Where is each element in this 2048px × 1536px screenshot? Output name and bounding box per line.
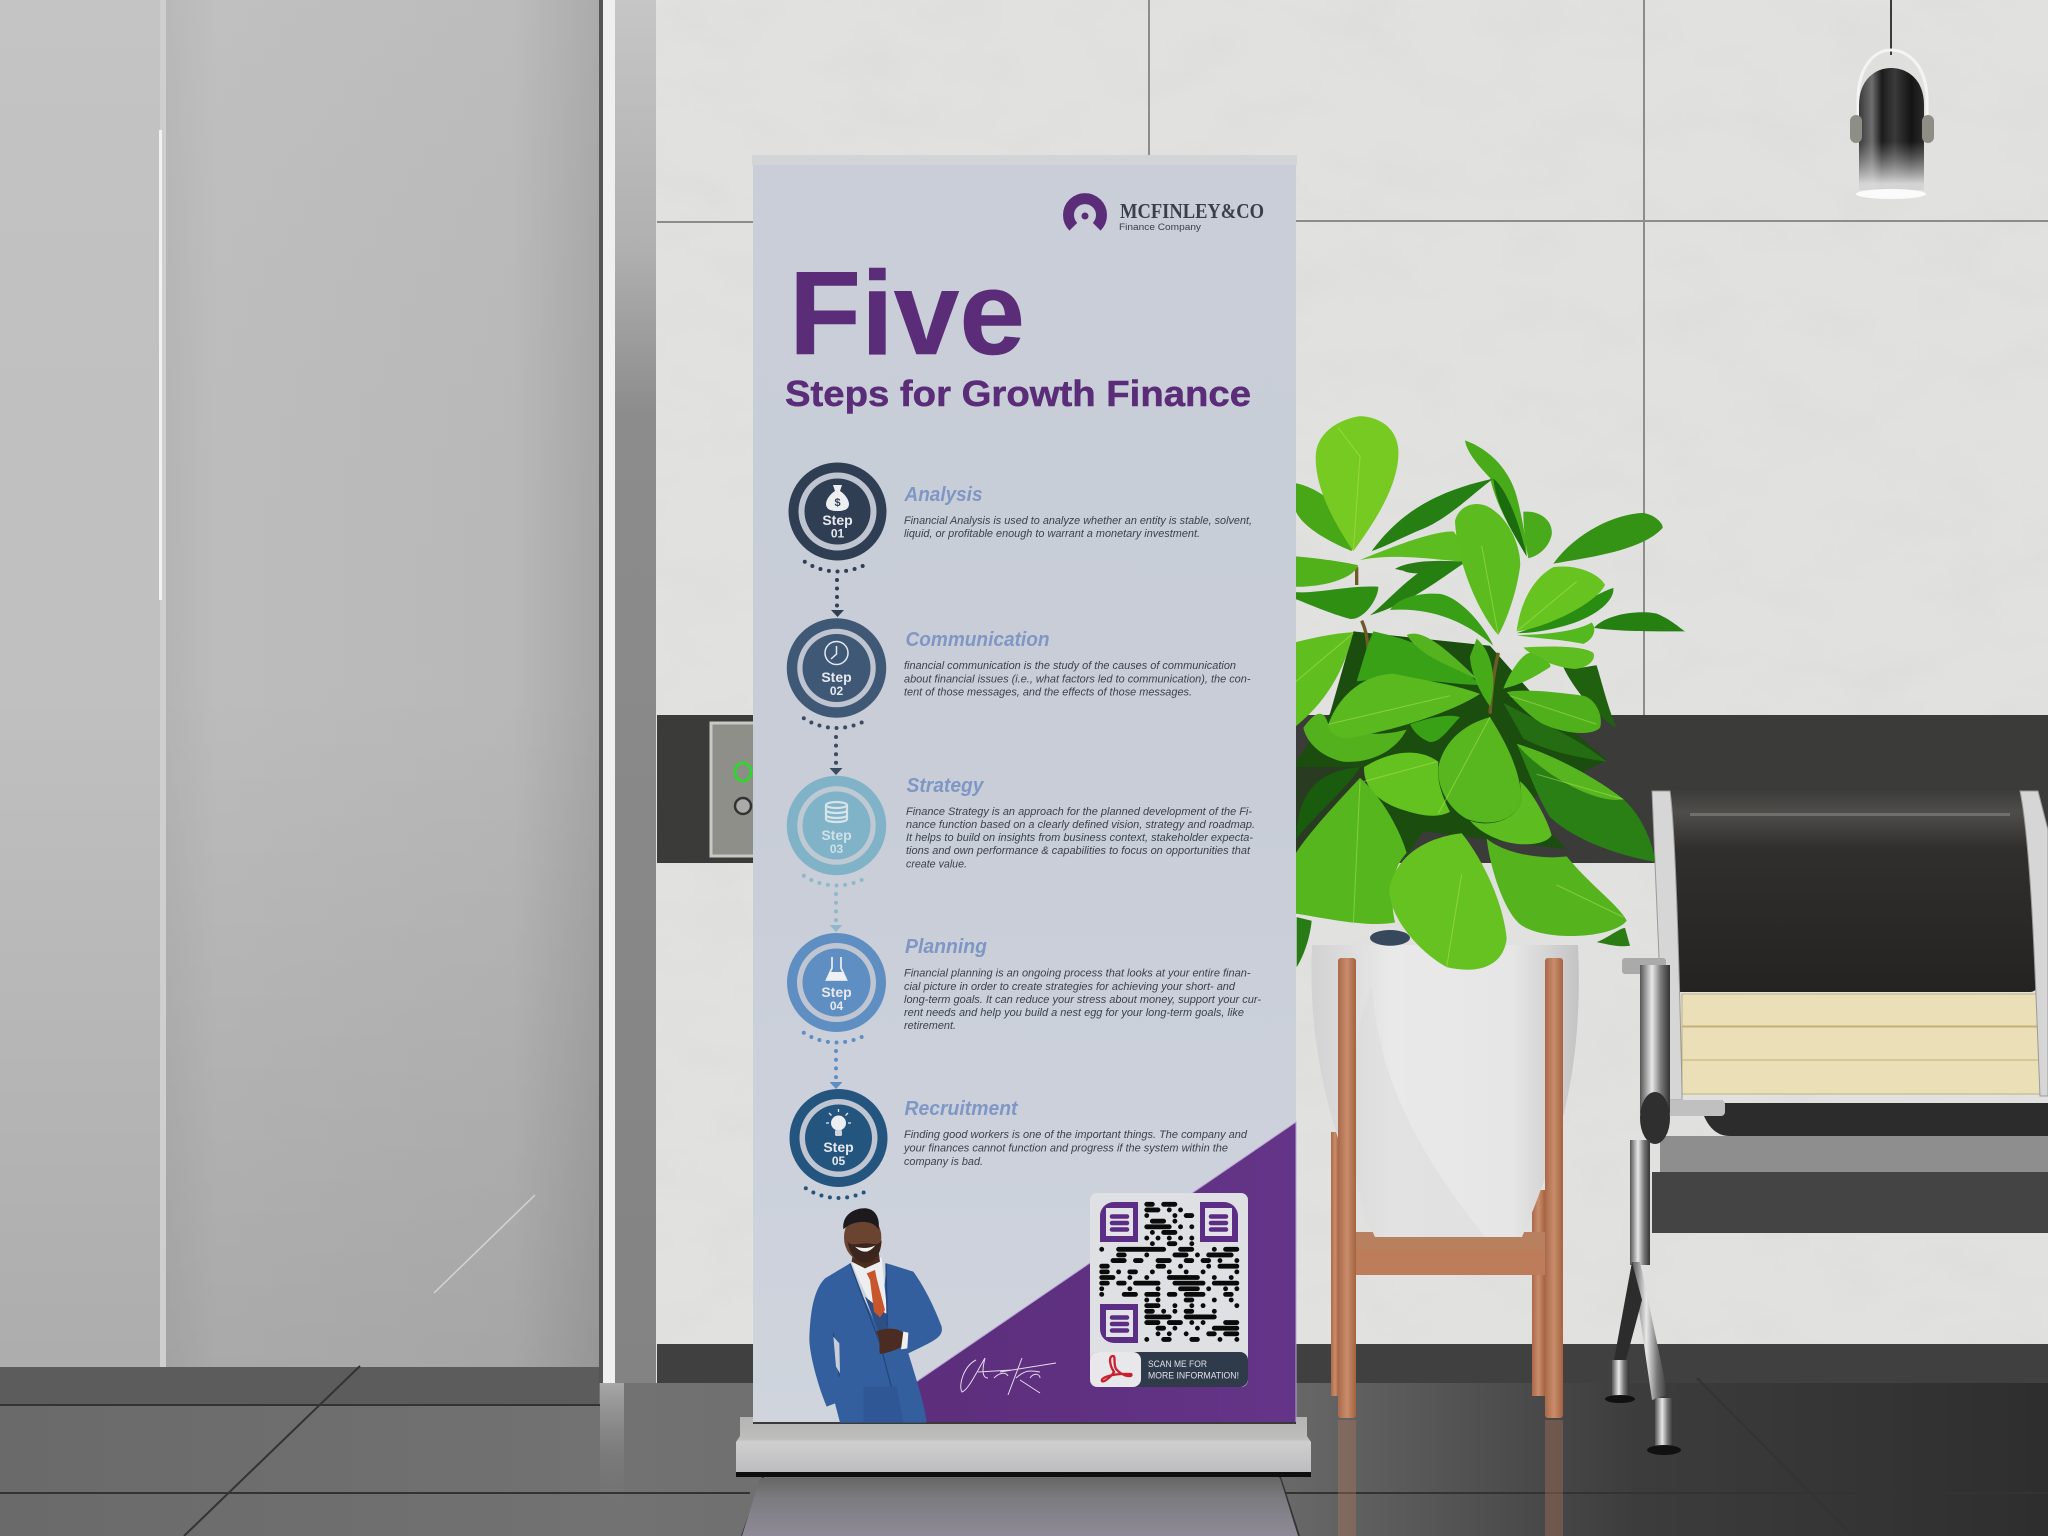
- call button panel: [711, 723, 756, 856]
- chrome leg: [1605, 958, 1681, 1455]
- scan caption: SCAN ME FOR: [1148, 1359, 1207, 1370]
- skirting: [657, 1344, 2048, 1384]
- leaf veins: [1296, 428, 1623, 967]
- trouser shade: [863, 1387, 903, 1423]
- heading: Analysis: [904, 484, 982, 506]
- dotted arc: [804, 718, 869, 728]
- logo tagline: Finance Company: [1119, 222, 1201, 233]
- description: Financial planning is an ongoing process that looks at your entire finan-: [904, 968, 1251, 980]
- step 02 badge: 02: [830, 684, 843, 698]
- icon: money bag: $: [834, 497, 841, 509]
- heading: Recruitment: [904, 1098, 1019, 1120]
- step 05 text: [903, 1098, 1248, 1168]
- neck: [852, 1250, 880, 1268]
- description: tions and own performance & capabilities to focus on opportunities that: [906, 845, 1251, 857]
- fiddle leaf plant: [1296, 416, 1685, 970]
- right arm: [2020, 791, 2048, 1096]
- lamp bracket: [1858, 50, 1927, 125]
- description: It helps to build on insights from business context, stakeholder expecta-: [906, 832, 1253, 844]
- planter shadow: [1351, 985, 1485, 1237]
- step 05 label: Step: [823, 1139, 854, 1155]
- white planter: [1311, 945, 1579, 1237]
- banner top rail: [752, 155, 1297, 165]
- floor: [0, 1383, 2048, 1536]
- description: Finance Strategy is an approach for the planned development of the Fi-: [906, 806, 1252, 818]
- description: long-term goals. It can reduce your stress about money, support your cur-: [904, 994, 1261, 1006]
- description: create value.: [906, 858, 967, 870]
- dotted arc: [805, 562, 870, 571]
- stems: [1357, 567, 1498, 714]
- roll-up banner stand base: [736, 1417, 1311, 1477]
- door: [166, 0, 599, 1368]
- cuff: [901, 1332, 908, 1349]
- step 04 label: Step: [821, 984, 852, 1000]
- description: [904, 660, 1251, 698]
- step 02 text: [904, 629, 1251, 698]
- floor joints: [0, 1366, 2048, 1536]
- description: retirement.: [904, 1020, 956, 1032]
- step 01 label: Step: [822, 512, 853, 528]
- ceiling lamp: [1850, 0, 1934, 199]
- description: [903, 1129, 1248, 1168]
- icon: database: [826, 802, 847, 822]
- description: cial picture in order to create strategies for achieving your short- and: [904, 981, 1236, 993]
- QR finder top left: [1100, 1202, 1138, 1242]
- heading: Planning: [905, 936, 987, 958]
- face: [844, 1214, 881, 1261]
- wooden plant stand back legs and crossbars: [1331, 1132, 1546, 1396]
- logo name: MCFINLEY&CO: [1120, 199, 1264, 223]
- bench back: [1672, 788, 2038, 992]
- bench back highlight: [1690, 813, 2010, 816]
- QR modules: [1102, 1204, 1237, 1339]
- signature: [961, 1358, 1056, 1395]
- door frame: [599, 0, 603, 1383]
- description: Finding good workers is one of the important things. The company and: [904, 1129, 1248, 1141]
- vest: [865, 1297, 889, 1340]
- subtitle: Steps for Growth Finance: [785, 373, 1251, 414]
- hair: [843, 1208, 879, 1229]
- arrow: step 04 to 05: [830, 1051, 842, 1089]
- description: nance function based on a clearly defined vision, strategy and roadmap.: [906, 819, 1255, 831]
- dark wall band: [657, 715, 2048, 863]
- description: [906, 806, 1255, 870]
- step 04 badge: [792, 938, 881, 1042]
- frame reflection: [600, 1383, 624, 1503]
- elevator: [0, 0, 656, 1383]
- description: liquid, or profitable enough to warrant a monetary investment.: [904, 528, 1200, 540]
- cream slats: [1682, 994, 2040, 1094]
- marble texture: [655, 0, 2048, 1345]
- scan footer: [1090, 1352, 1248, 1387]
- scan footer: MORE INFORMATION!: [1148, 1370, 1239, 1382]
- banner background: [753, 165, 1296, 1423]
- QR finder bottom left: [1100, 1304, 1138, 1343]
- QR finder top right: [1200, 1202, 1238, 1242]
- seat: [1700, 1103, 2048, 1136]
- heading: Strategy: [906, 775, 984, 797]
- lamp knobs: [1850, 115, 1862, 143]
- plant shadow mass: [1297, 631, 1607, 856]
- step 05 badge: 05: [832, 1154, 845, 1168]
- dotted arc: [804, 876, 869, 885]
- icon: light bulb: [826, 1109, 851, 1136]
- step 01 badge: [794, 468, 882, 571]
- smile: [855, 1245, 875, 1252]
- description: Financial Analysis is used to analyze whether an entity is stable, solvent,: [904, 515, 1252, 527]
- step 03 label: Step: [821, 827, 852, 843]
- title: Five: [789, 247, 1025, 380]
- shirt: [852, 1257, 887, 1313]
- logo: [1069, 199, 1264, 233]
- icon: flask: [826, 957, 846, 980]
- step 05 badge: [794, 1094, 882, 1198]
- purple corner: [856, 1122, 1296, 1423]
- tie: [867, 1270, 885, 1317]
- bench lower rail: [1652, 1172, 2048, 1233]
- step 04 badge: 04: [830, 999, 843, 1013]
- lamp glow: [1856, 189, 1926, 199]
- left arm: [1652, 791, 1682, 1100]
- step 03 badge: 03: [830, 842, 843, 856]
- stand reflection: [1338, 1420, 1563, 1536]
- dotted arc: [804, 1033, 869, 1042]
- leaves: [1296, 416, 1685, 970]
- step 02 label: Step: [821, 669, 852, 685]
- QR card: [1090, 1193, 1248, 1387]
- lamp body: [1859, 68, 1924, 190]
- dotted arc: [806, 1188, 871, 1198]
- description: [904, 968, 1261, 1032]
- description: financial communication is the study of the causes of communication: [904, 660, 1236, 672]
- green call button: [735, 763, 751, 781]
- icon: clock: [825, 642, 848, 664]
- arrow: step 01 to 02: [831, 580, 844, 617]
- step 03 badge: [792, 781, 881, 885]
- left panel: [0, 0, 160, 1368]
- description: about financial issues (i.e., what factors led to communication), the con-: [904, 674, 1251, 686]
- banner base reflection: [742, 1478, 1298, 1536]
- hand: [876, 1329, 903, 1354]
- description: company is bad.: [904, 1156, 983, 1168]
- icon: pdf tile: [1090, 1352, 1141, 1387]
- wooden plant stand front legs: [1338, 958, 1563, 1418]
- step 03 text: [906, 775, 1255, 870]
- beard: [848, 1240, 882, 1263]
- card: [1090, 1193, 1248, 1387]
- step 01 badge: 01: [831, 526, 844, 540]
- arm gap: [833, 1337, 840, 1373]
- threshold: [0, 1367, 599, 1405]
- wall background: [655, 0, 2048, 1345]
- lapels: [833, 1263, 900, 1420]
- step 02 badge: [792, 624, 881, 728]
- river stones: [1370, 930, 1410, 946]
- scratch: [434, 1195, 535, 1293]
- logo mark: [1069, 199, 1102, 227]
- description: your finances cannot function and progress if the system within the: [903, 1142, 1228, 1154]
- description: tent of those messages, and the effects of those messages.: [904, 686, 1192, 698]
- description: [904, 515, 1252, 540]
- banner: [753, 165, 1296, 1424]
- step 01 text: [904, 484, 1252, 540]
- heading: Communication: [906, 629, 1050, 651]
- jacket: [809, 1263, 942, 1423]
- waiting bench: [1605, 788, 2048, 1455]
- wall panel joints: [657, 0, 2048, 715]
- lamp cable: [1890, 0, 1892, 55]
- arrow: step 03 to 04: [830, 894, 842, 932]
- grey call button: [735, 798, 751, 814]
- arrow: step 02 to 03: [830, 737, 842, 775]
- step 04 text: [904, 936, 1261, 1032]
- description: rent needs and help you build a nest egg for your long-term goals, like: [904, 1007, 1244, 1019]
- businessman portrait: [809, 1208, 942, 1423]
